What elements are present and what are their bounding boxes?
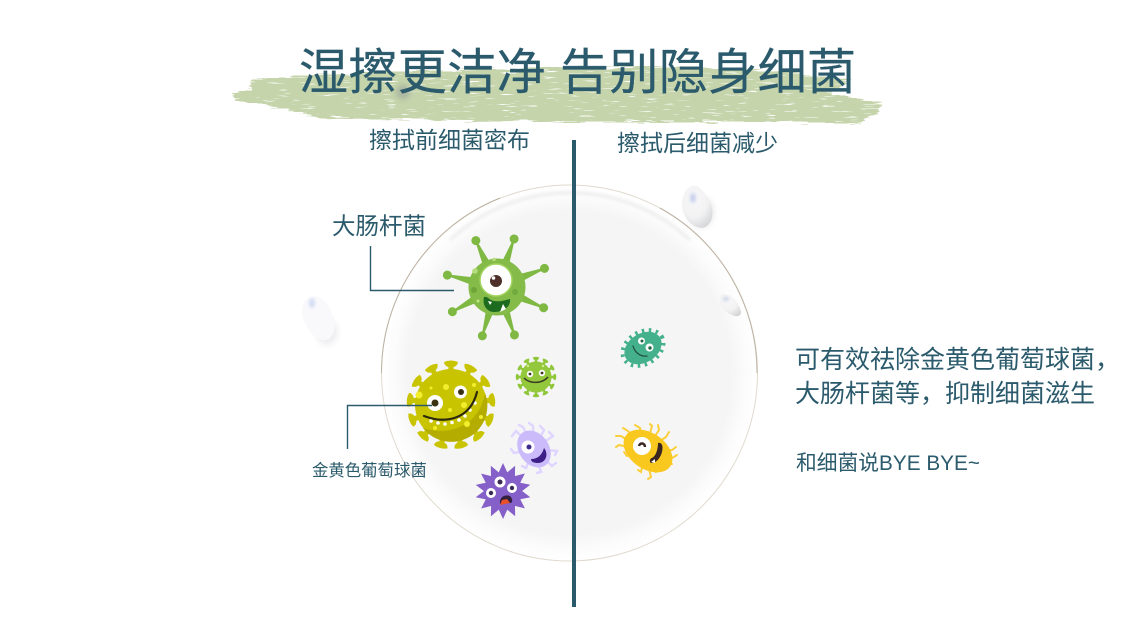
center divider line [572,140,576,607]
pale purple bacterium [510,423,558,474]
water drop: top right [682,186,714,228]
water drop: left [302,297,338,345]
label: S. aureus: 金黄色葡萄球菌 [312,462,427,480]
subheading: after wiping: 擦拭后细菌减少 [617,130,778,156]
yellow-green large bacterium [406,360,496,450]
water drop: small right [720,294,741,316]
connector line: E. coli label [370,246,454,290]
subheading: before wiping: 擦拭前细菌密布 [369,127,530,153]
brush stroke behind title [232,67,883,122]
teal bacterium [616,323,670,373]
connector line: S. aureus label [348,406,432,449]
brush smudge [396,85,410,99]
closing text: 和细菌说BYE BYE~ [796,452,980,475]
small lime bacterium [516,357,556,397]
description text: 大肠杆菌等，抑制细菌滋生 [795,380,1095,408]
title: 湿擦更洁净 告别隐身细菌 [299,46,856,100]
petri dish [381,185,758,561]
label: E. coli: 大肠杆菌 [332,213,426,239]
yellow bacterium [616,421,680,481]
description text: 可有效祛除金黄色葡萄球菌， [795,346,1120,374]
description text [795,346,1120,408]
green one-eyed bacterium [442,233,550,341]
dark purple spiky bacterium [475,463,531,519]
